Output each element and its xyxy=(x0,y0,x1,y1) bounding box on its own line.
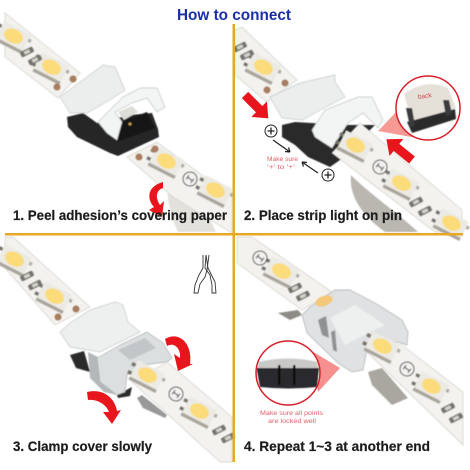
adhesive paper xyxy=(278,310,302,320)
divider: vertical xyxy=(232,24,235,462)
callout: zoom cone xyxy=(310,350,340,392)
panel: step 2 place strip on pin xyxy=(232,27,470,242)
strip light: upper section xyxy=(0,13,80,98)
callout text: back: back xyxy=(418,92,433,101)
panel: step 4 repeat xyxy=(237,237,464,454)
connector xyxy=(270,75,383,167)
icon: red curved arrow top right xyxy=(165,336,193,371)
strip light: lower section xyxy=(360,329,464,445)
strip light: lower section xyxy=(125,358,236,462)
strip light: lower section xyxy=(127,142,236,233)
icon: red curved arrow bottom xyxy=(87,391,121,424)
connector xyxy=(302,290,408,372)
polarity note line 2: ‘+’ to ‘+’ xyxy=(267,164,296,171)
title: How to connect xyxy=(177,7,291,24)
strip light: lower section xyxy=(332,123,470,242)
adhesive paper xyxy=(137,395,167,418)
connector xyxy=(60,65,165,156)
divider: horizontal xyxy=(5,233,463,236)
icon: pliers xyxy=(194,255,216,293)
adhesive paper curl xyxy=(168,186,216,232)
callout: zoom cone xyxy=(378,110,422,139)
step 3 label: 3. Clamp cover slowly xyxy=(13,438,152,454)
callout text line 2: are locked well xyxy=(268,418,317,425)
step 1 label: 1. Peel adhesion’s covering paper xyxy=(13,207,228,223)
polarity mark: right plus xyxy=(322,169,334,181)
icon: red arrow right xyxy=(379,131,419,169)
polarity note: Make sure xyxy=(267,156,298,163)
connector xyxy=(60,302,172,398)
callout: back of connector xyxy=(396,76,460,140)
adhesive paper curl xyxy=(351,175,418,232)
strip light: upper section xyxy=(0,237,90,325)
arrow: polarity right xyxy=(302,162,318,173)
step 4 label: 4. Repeat 1~3 at another end xyxy=(244,438,430,454)
panel: step 3 clamp cover xyxy=(0,237,236,462)
polarity mark: left plus xyxy=(265,125,277,137)
icon: red curved arrow xyxy=(149,182,164,217)
callout text: Make sure all points xyxy=(260,410,324,417)
strip light: upper section xyxy=(237,237,332,310)
icon: red arrow left xyxy=(237,87,276,126)
callout: lock points xyxy=(256,341,320,405)
panel: step 1 peel covering paper xyxy=(0,13,236,233)
step 2 label: 2. Place strip light on pin xyxy=(244,207,402,223)
arrow: polarity left xyxy=(273,140,290,152)
strip light: upper section xyxy=(232,27,297,102)
